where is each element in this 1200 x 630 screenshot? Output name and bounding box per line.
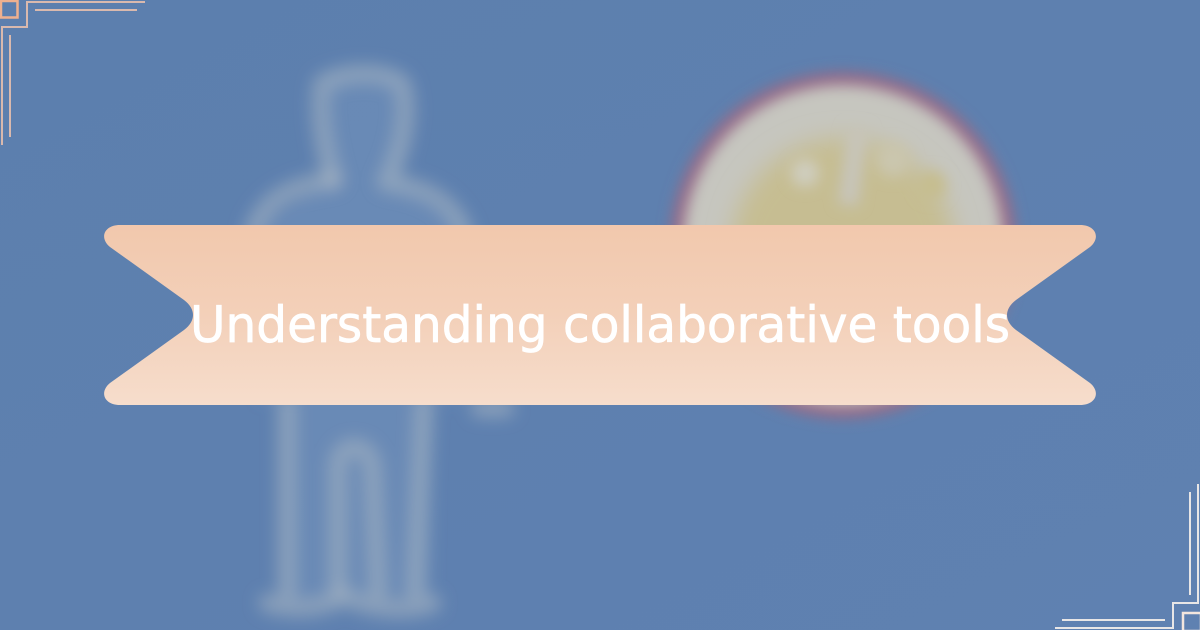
- blurred circular badge: [670, 72, 1016, 418]
- ribbon banner: [104, 225, 1096, 405]
- blurred figure outline: [253, 74, 505, 608]
- corner ornament: bottom right: [1055, 484, 1200, 630]
- corner ornament: top left: [1, 1, 145, 145]
- title: Understanding collaborative tools: [190, 296, 1010, 354]
